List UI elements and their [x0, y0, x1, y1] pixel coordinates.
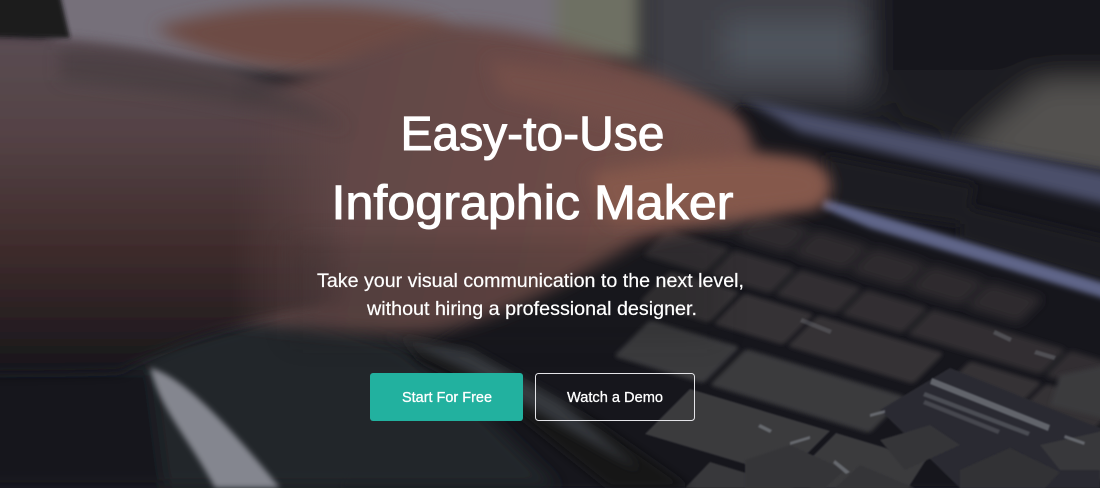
- notice plate: [880, 368, 1100, 488]
- main hand: [200, 25, 828, 333]
- key row 7: [744, 453, 914, 488]
- forearm: [0, 34, 324, 371]
- white curved edge: [150, 368, 280, 488]
- back hand: [155, 5, 475, 72]
- fingers: [490, 60, 828, 222]
- key row 4: [614, 320, 1100, 488]
- button: watch a demo: Watch a Demo: [567, 390, 663, 406]
- keyboard body: [734, 103, 1100, 198]
- hair texture: [64, 52, 306, 114]
- button: start for free: Start For Free: [402, 390, 492, 406]
- key row 1: [704, 216, 1040, 323]
- headline: [332, 108, 734, 230]
- upper key block, out of focus: [831, 162, 966, 237]
- button: watch a demo: [536, 374, 694, 420]
- key row 2: [645, 232, 1100, 380]
- top-left dark sleeve: [0, 0, 70, 38]
- subtitle: [317, 270, 744, 320]
- bottom black and wrist rest: [0, 328, 548, 488]
- lighter strip by wrist rest: [400, 338, 630, 464]
- subtitle: without hiring a professional designer.: [366, 298, 697, 320]
- headline: Easy-to-Use: [400, 108, 664, 161]
- key row 3: [642, 272, 1100, 428]
- key row 6: [685, 425, 1100, 488]
- photo dark wash on text area: [296, 238, 620, 329]
- subtitle: Take your visual communication to the next level,: [317, 270, 744, 292]
- headline: Infographic Maker: [332, 177, 734, 230]
- keyboard blue strip: [822, 198, 1100, 306]
- keyboard printed notice and key legends: [758, 318, 1085, 474]
- button: start for free: [370, 373, 523, 421]
- key row 5: [645, 389, 926, 488]
- keyboard blue edge: [745, 100, 1100, 210]
